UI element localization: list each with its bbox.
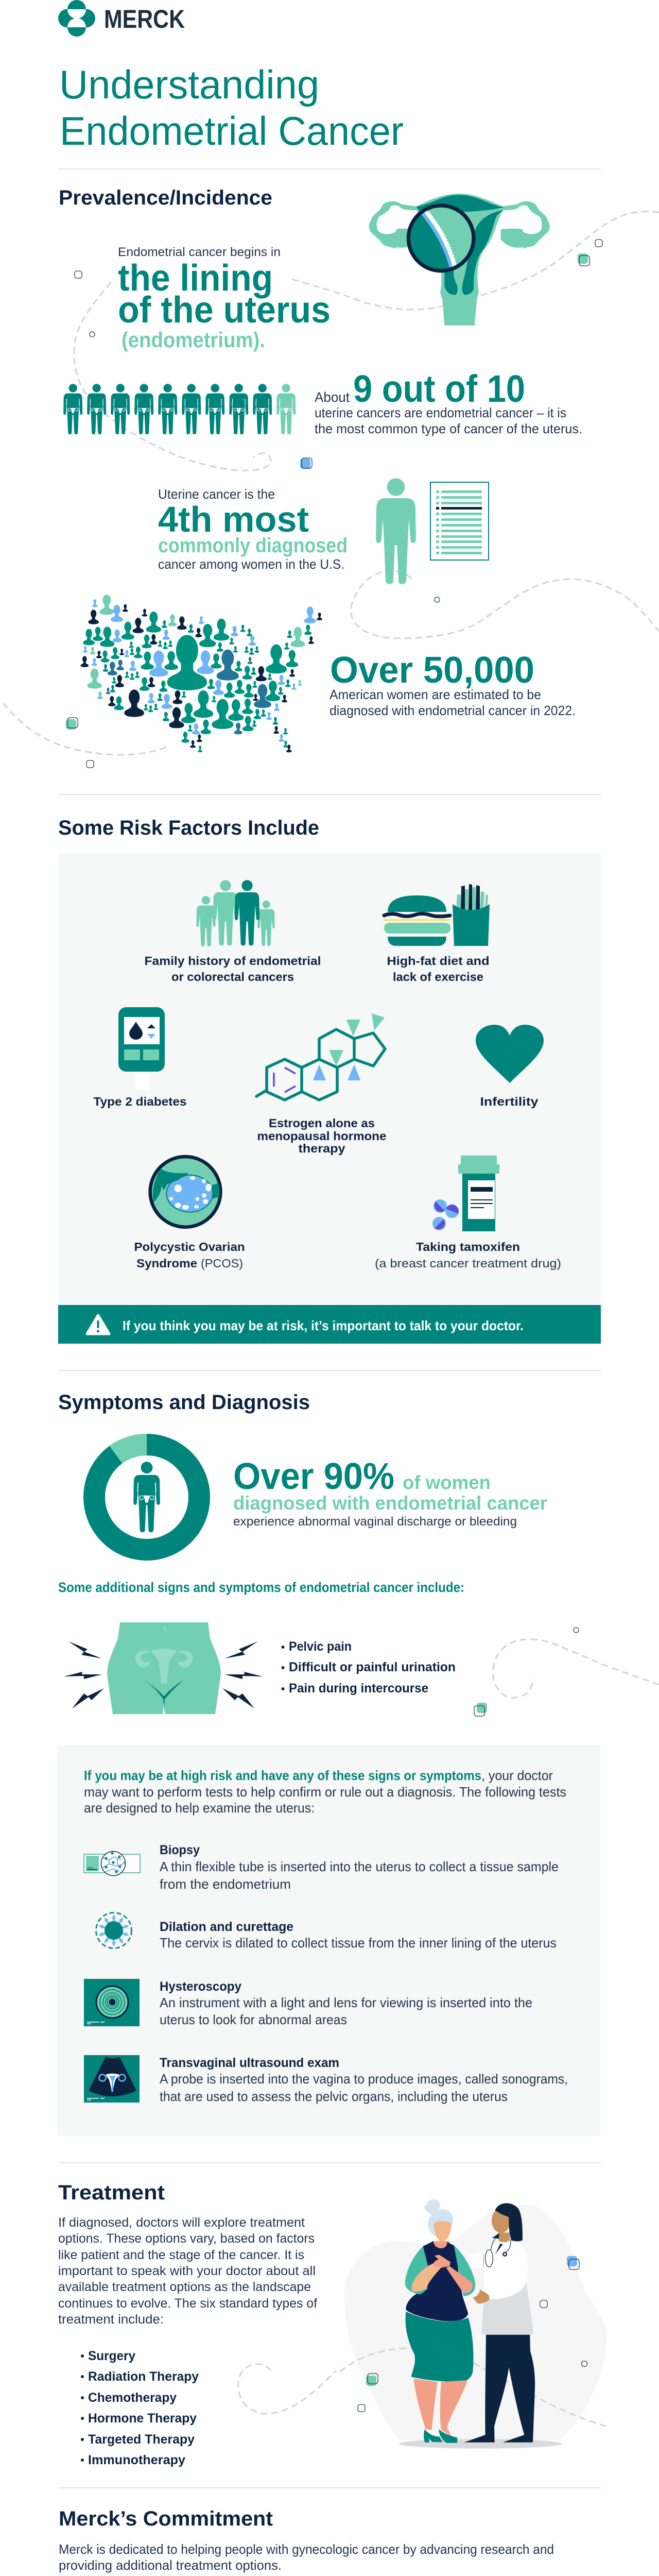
- decorative floating markers: [66, 240, 602, 2412]
- test: biopsy: [160, 1843, 559, 1892]
- pictogram: 9 of 10 people: [63, 384, 296, 434]
- label: family history: or colorectal cancers: [171, 970, 294, 984]
- stat: over 90 percent: Over 90%: [233, 1456, 394, 1497]
- text block: the lining of the uterus: the lining: [118, 258, 273, 299]
- stat: over 50,000: diagnosed with endometrial cancer in 2022.: [330, 703, 576, 718]
- list: symptoms: Difficult or painful urination: [289, 1660, 456, 1674]
- stat: 9 out of 10: 9 out of 10: [353, 367, 525, 410]
- stat: over 50,000: American women are estimated to be: [330, 687, 541, 702]
- text block: treatment options: important to speak with your doctor about all: [58, 2264, 316, 2278]
- stat: over 90 percent: [233, 1456, 547, 1529]
- label: estrogen alone: [257, 1116, 386, 1155]
- test: transvaginal ultrasound: Transvaginal ultrasound exam: [160, 2056, 339, 2070]
- icon: heart: [476, 1025, 544, 1083]
- icon: ultrasound sonogram: [84, 2055, 140, 2103]
- subheading: additional signs: Some additional signs and symptoms of endometrial cancer include:: [58, 1580, 464, 1595]
- list: symptoms: Pain during intercourse: [289, 1681, 428, 1696]
- icon: dilation: [96, 1912, 132, 1948]
- icon: biopsy slide: [84, 1852, 140, 1875]
- test: hysteroscopy: uterus to look for abnormal areas: [160, 2012, 347, 2027]
- section: risk factors: [58, 817, 601, 1344]
- icon: burger and fries: [384, 884, 490, 946]
- list: treatment types: Chemotherapy: [88, 2391, 177, 2405]
- text block: treatment options: options. These options vary, based on factors: [58, 2231, 315, 2246]
- text block: high risk intro: , your doctor: [481, 1768, 553, 1783]
- test: biopsy: A thin flexible tube is inserted into the uterus to collect a tissue sample: [160, 1859, 559, 1874]
- label: tamoxifen: Taking tamoxifen: [416, 1240, 520, 1253]
- heading: Symptoms and Diagnosis: Symptoms and Diagnosis: [58, 1391, 310, 1414]
- callout: talk to your doctor: [58, 1305, 601, 1344]
- text block: treatment options: [58, 2215, 317, 2327]
- text block: treatment options: like patient and the stage of the cancer. It is: [58, 2248, 304, 2262]
- test: hysteroscopy: An instrument with a light and lens for viewing is inserted into the: [160, 1995, 532, 2010]
- figure: patient: [405, 2199, 475, 2443]
- text block: treatment options: continues to evolve. The six standard types of: [58, 2296, 317, 2311]
- list: treatment types: Targeted Therapy: [88, 2432, 195, 2447]
- label: infertility: Infertility: [480, 1095, 539, 1108]
- section: Merck's commitment: Merck’s Commitment: [59, 2507, 273, 2530]
- section: Merck's commitment: providing additional treatment options.: [59, 2557, 282, 2573]
- icon: glucose meter: [118, 1007, 165, 1090]
- callout: talk to your doctor: If you think you may be at risk, it’s important to talk to your doctor.: [123, 1318, 524, 1333]
- label: family history: [144, 954, 321, 984]
- text block: treatment options: treatment include:: [58, 2312, 164, 2327]
- stat: 4th most commonly diagnosed: commonly diagnosed: [158, 534, 348, 557]
- icon: pill bottle and pills: [432, 1156, 499, 1231]
- icon: person: [376, 478, 416, 584]
- section: treatment: [58, 2181, 608, 2467]
- map: United States made of silhouettes: [81, 595, 322, 752]
- icon: ranked list document: [430, 482, 489, 560]
- test: transvaginal ultrasound: that are used to assess the pelvic organs, including the uterus: [160, 2089, 508, 2104]
- label: high-fat diet: lack of exercise: [393, 970, 483, 984]
- test: dilation and curettage: The cervix is dilated to collect tissue from the inner lining of the uterus: [160, 1935, 557, 1951]
- test: dilation and curettage: [160, 1920, 557, 1951]
- stat: 9 out of 10: uterine cancers are endometrial cancer – it is: [315, 405, 566, 420]
- label: PCOS: [134, 1240, 245, 1270]
- list: symptoms: [281, 1639, 456, 1696]
- label: high-fat diet: [387, 954, 489, 984]
- figure: doctor: [464, 2203, 535, 2443]
- section: Merck's commitment: Merck is dedicated to helping people with gynecologic cancer by advancing research and: [59, 2541, 554, 2557]
- stat: 4th most commonly diagnosed: cancer among women in the U.S.: [158, 556, 344, 572]
- text block: the lining of the uterus: [118, 245, 331, 352]
- text block: high risk intro: may want to perform tests to help confirm or rule out a diagnosis. The following tests: [84, 1784, 566, 1800]
- label: high-fat diet: High-fat diet and: [387, 954, 489, 968]
- heading: Some Risk Factors Include: Some Risk Factors Include: [58, 817, 319, 839]
- panel: risk factors background: [58, 853, 601, 1305]
- label: family history: Family history of endometrial: [144, 954, 321, 968]
- list: treatment types: Surgery: [88, 2349, 135, 2363]
- test: hysteroscopy: [160, 1979, 532, 2027]
- icon: uterus with magnified lining: [369, 194, 550, 326]
- illustration: doctor and patient: [340, 2199, 608, 2449]
- section: prevalence and incidence: [59, 187, 582, 752]
- list: treatment types: Hormone Therapy: [88, 2411, 197, 2426]
- stat: 9 out of 10: [315, 367, 582, 436]
- title: Understanding: [59, 62, 319, 107]
- stat: over 90 percent: of women: [403, 1472, 491, 1493]
- stat: over 90 percent: experience abnormal vaginal discharge or bleeding: [233, 1515, 517, 1529]
- list: treatment types: Immunotherapy: [88, 2453, 185, 2467]
- list: symptoms: Pelvic pain: [289, 1639, 352, 1654]
- test: hysteroscopy: Hysteroscopy: [160, 1979, 241, 1994]
- label: estrogen alone: menopausal hormone: [257, 1129, 386, 1143]
- text block: the lining of the uterus: Endometrial cancer begins in: [118, 245, 281, 259]
- stat: over 90 percent: diagnosed with endometrial cancer: [233, 1493, 547, 1514]
- stat: over 50,000: Over 50,000: [330, 650, 534, 691]
- label: tamoxifen: [375, 1240, 561, 1270]
- test: transvaginal ultrasound: A probe is inserted into the vagina to produce images, called sonograms,: [160, 2071, 568, 2087]
- heading: Prevalence/Incidence: Prevalence/Incidence: [59, 187, 272, 209]
- icon: family: [197, 880, 275, 946]
- label: PCOS: Polycystic Ovarian: [134, 1240, 245, 1253]
- header logo: Merck: MERCK: [104, 5, 185, 33]
- title: Endometrial Cancer: [60, 108, 404, 154]
- heading: Treatment: Treatment: [58, 2181, 165, 2204]
- label: estrogen alone: Estrogen alone as: [269, 1116, 375, 1130]
- list: treatment types: [81, 2349, 199, 2467]
- text block: treatment options: available treatment options as the landscape: [58, 2280, 311, 2294]
- stat: 4th most commonly diagnosed: Uterine cancer is the: [158, 486, 275, 502]
- text block: high risk intro: [84, 1768, 566, 1816]
- text block: the lining of the uterus: of the uterus: [118, 290, 331, 331]
- stat: 4th most commonly diagnosed: 4th most: [158, 499, 309, 539]
- test: biopsy: from the endometrium: [160, 1876, 291, 1892]
- stat: 9 out of 10: About: [315, 389, 350, 405]
- label: tamoxifen: (a breast cancer treatment drug): [375, 1257, 561, 1270]
- text block: high risk intro: If you may be at high risk and have any of these signs or symptoms: [84, 1768, 481, 1783]
- label: PCOS: (PCOS): [201, 1257, 243, 1270]
- stat: 4th most commonly diagnosed: [158, 486, 348, 572]
- section: Merck's commitment: [59, 2507, 554, 2573]
- text block: the lining of the uterus: (endometrium).: [122, 328, 265, 352]
- icon: hysteroscopy view: [84, 1979, 140, 2026]
- test: dilation and curettage: Dilation and curettage: [160, 1920, 293, 1934]
- list: treatment types: Radiation Therapy: [88, 2369, 199, 2384]
- icon: pelvic pain: [64, 1622, 263, 1714]
- icon: estrogen molecule: [256, 1013, 385, 1100]
- chart: donut over 90 percent: [94, 1434, 199, 1550]
- section: symptoms and diagnosis: [58, 1391, 600, 2136]
- text block: high risk intro: are designed to help examine the uterus:: [84, 1800, 315, 1816]
- text block: treatment options: If diagnosed, doctors will explore treatment: [58, 2215, 305, 2230]
- test: biopsy: Biopsy: [160, 1843, 200, 1857]
- header logo: Merck: [58, 0, 185, 37]
- title: [59, 62, 404, 154]
- decorative dashed lines: [3, 211, 659, 1698]
- label: estrogen alone: therapy: [299, 1142, 345, 1155]
- label: PCOS: Syndrome: [136, 1257, 197, 1270]
- stat: over 50,000: [330, 650, 576, 718]
- test: transvaginal ultrasound: [160, 2056, 568, 2104]
- icon: polycystic ovary: [150, 1157, 220, 1227]
- label: type 2 diabetes: Type 2 diabetes: [94, 1095, 186, 1108]
- panel: diagnostic tests: [58, 1745, 600, 2136]
- stat: 9 out of 10: the most common type of cancer of the uterus.: [315, 421, 582, 436]
